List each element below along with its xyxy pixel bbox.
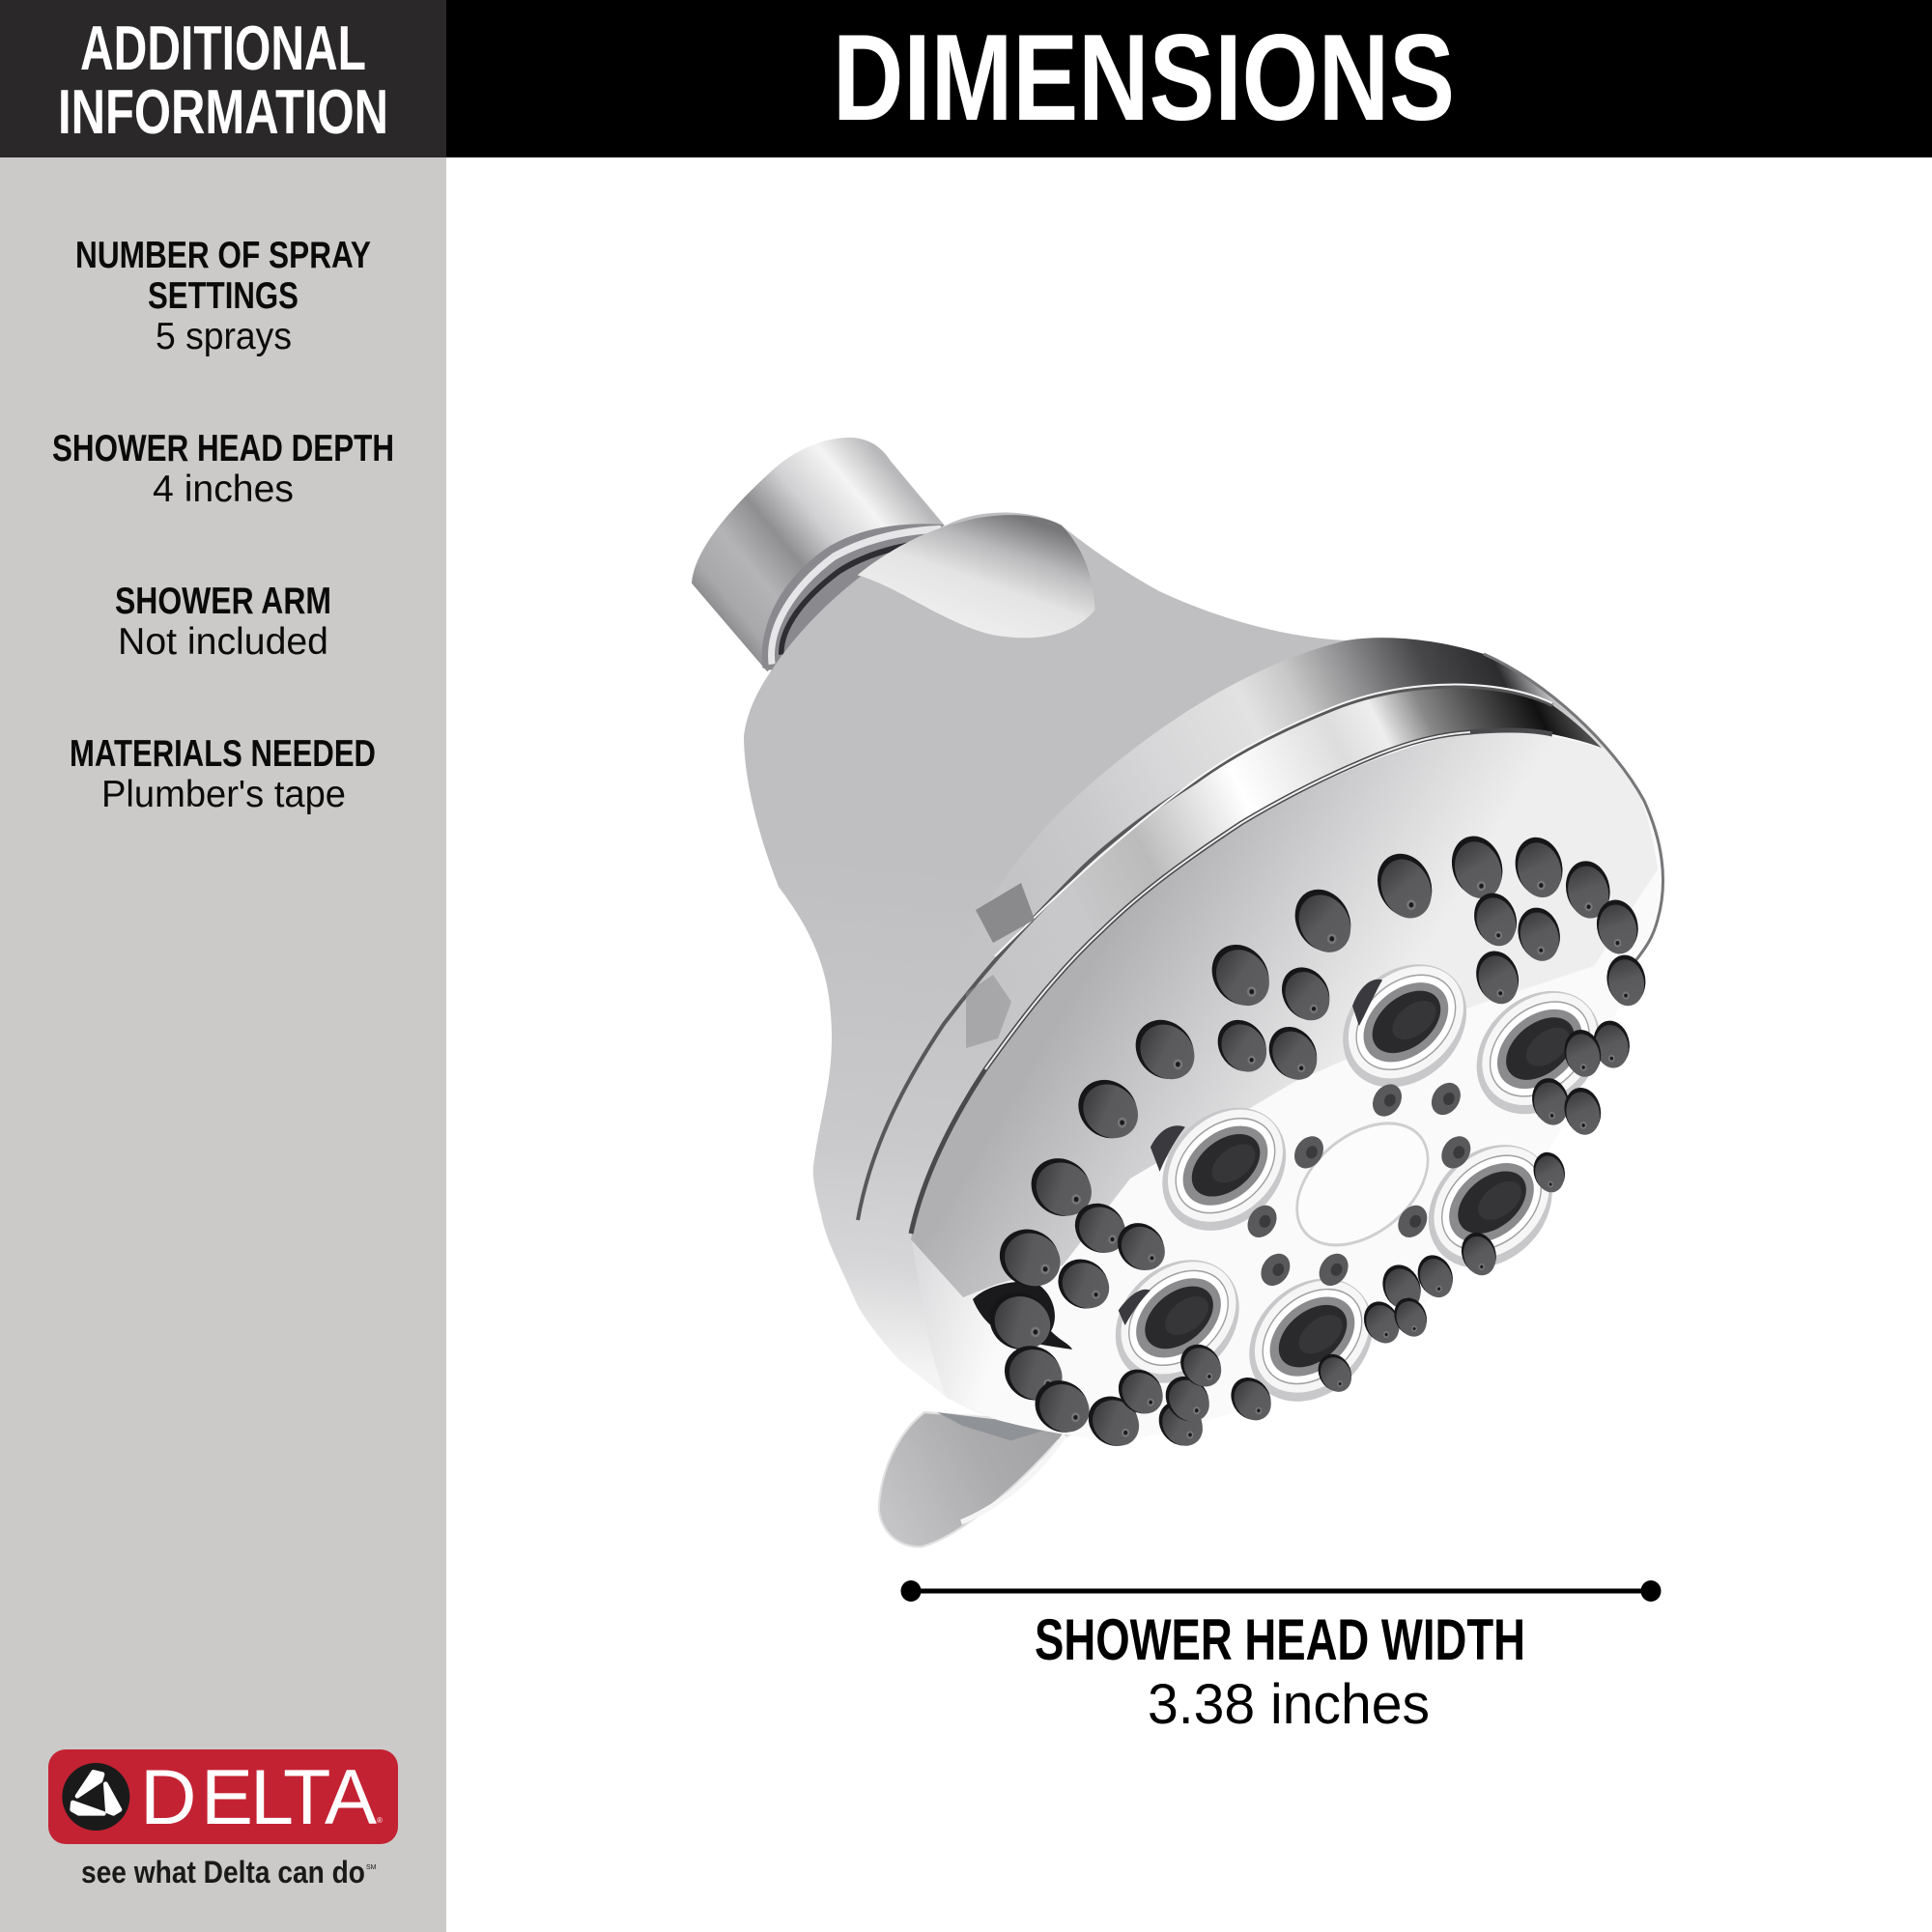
dimension line (900, 1580, 1662, 1602)
spec: shower arm: Not included (118, 621, 328, 663)
label: shower head width (1035, 1607, 1525, 1736)
spec: materials needed: MATERIALS NEEDED (70, 733, 376, 775)
spec: shower arm: SHOWER ARM (115, 581, 331, 622)
rim reflection patches (966, 883, 1035, 1048)
spec: shower head depth (52, 428, 394, 510)
header: additional information: ADDITIONAL (80, 13, 366, 83)
product: shower head (692, 438, 1664, 1547)
logo: Delta: SM (366, 1864, 377, 1871)
spec: number of spray settings: 5 sprays (156, 316, 292, 357)
spec: materials needed: Plumber's tape (101, 774, 346, 815)
inner rim band (858, 687, 1662, 1256)
groove highlight (995, 685, 1552, 956)
arm connector, swivel ring and lever (692, 438, 1089, 1547)
face edge line (911, 730, 1552, 1234)
header: additional information (0, 0, 446, 157)
header: dimensions (446, 0, 1932, 157)
dome reflection (858, 515, 1094, 638)
large spray jets (1094, 939, 1621, 1427)
lever (879, 1412, 1089, 1547)
outer rim band (858, 638, 1662, 1256)
spec: materials needed (70, 733, 376, 815)
center plate (1277, 1098, 1448, 1270)
arm connector cylinder (692, 438, 945, 671)
label: shower head width: SHOWER HEAD WIDTH (1035, 1607, 1525, 1672)
logo: Delta (48, 1749, 398, 1889)
header: additional information: INFORMATION (58, 76, 388, 147)
spec: shower head depth: 4 inches (153, 469, 294, 510)
spec: shower head depth: SHOWER HEAD DEPTH (52, 428, 394, 469)
lever shadow (937, 1412, 1055, 1440)
spec: number of spray settings (75, 235, 371, 357)
lever edge highlight (961, 1435, 1065, 1522)
body (744, 512, 1546, 1433)
spec: number of spray settings: NUMBER OF SPRAY (75, 235, 371, 276)
small holes (1241, 1076, 1476, 1293)
nozzle array (983, 826, 1651, 1455)
logo: Delta: see what Delta can do (81, 1855, 365, 1889)
face (911, 730, 1664, 1440)
groove line (858, 687, 1552, 1220)
panel: additional information sidebar (0, 0, 446, 1932)
header: dimensions: DIMENSIONS (833, 9, 1455, 146)
right edge line (1484, 654, 1663, 961)
icon: Delta triangle mark (62, 1763, 129, 1831)
logo: Delta: DELTA (140, 1754, 377, 1841)
black reflection near nozzle (973, 1282, 1072, 1350)
logo: Delta: ® (377, 1816, 383, 1825)
label: shower head width: 3.38 inches (1148, 1673, 1430, 1736)
spec: shower arm (115, 581, 331, 663)
jet reflections (1119, 980, 1382, 1325)
spec: number of spray settings: SETTINGS (148, 275, 298, 317)
face grey reflection (911, 731, 1658, 1297)
spray nozzles (983, 826, 1651, 1455)
swivel ring (762, 524, 945, 671)
